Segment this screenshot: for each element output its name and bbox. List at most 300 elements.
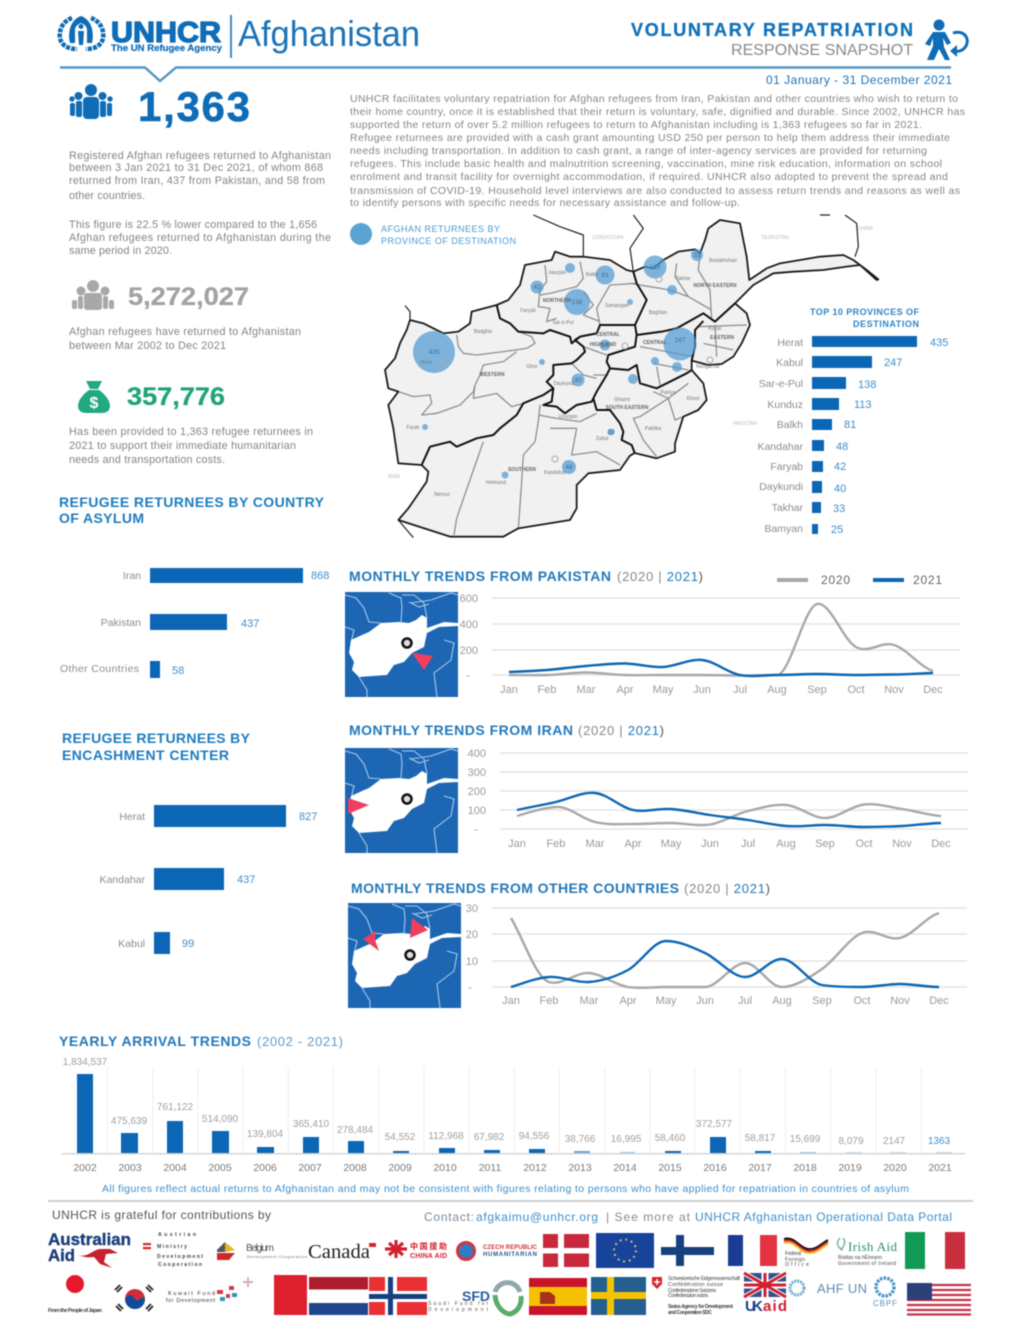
province names: Paktya — [660, 390, 676, 396]
year labels — [73, 1162, 952, 1174]
months: Oct — [853, 995, 871, 1007]
values — [182, 811, 317, 950]
months: May — [653, 684, 674, 696]
intro paragraph: transmission of COVID-19. Household level interviews are also conducted to assess return trends and reasons as well as — [350, 185, 960, 197]
bar values: 8,079 — [838, 1136, 864, 1147]
labels — [60, 570, 141, 675]
KPI: cumulative returns — [69, 280, 301, 352]
bubble values: 42 — [533, 284, 541, 291]
months: Jan — [500, 684, 518, 696]
months: Oct — [855, 838, 873, 850]
values: 247 — [884, 357, 902, 369]
logo: Czech Republic — [458, 1242, 538, 1260]
bar values: 365,410 — [293, 1119, 330, 1130]
logo: Canada: Canada — [308, 1241, 370, 1263]
bar chart: top 10 provinces: DESTINATION — [853, 319, 919, 329]
logo: Germany: Foreign — [785, 1257, 805, 1263]
province names — [406, 258, 737, 498]
heading: MONTHLY TRENDS FROM OTHER COUNTRIES — [351, 880, 679, 896]
icon: money bag — [78, 381, 110, 413]
logo: Switzerland: Confédération suisse — [668, 1282, 723, 1288]
flag: Spain — [529, 1278, 587, 1315]
bar values: 67,982 — [474, 1132, 505, 1143]
months: Jul — [733, 684, 747, 696]
months — [500, 684, 943, 696]
flag: Norway — [369, 1277, 427, 1315]
province names: Baghlan — [649, 310, 667, 316]
contact: Contact: — [424, 1210, 474, 1224]
province names: Nimroz — [434, 492, 450, 498]
panel: returnees by encashment center: ENCASHMENT CENTER — [62, 747, 229, 763]
panel: returnees by encashment center — [62, 730, 317, 954]
logo: Kuwait fund — [166, 1277, 253, 1304]
region names: HIGHLAND — [590, 342, 617, 348]
flag: United States — [907, 1283, 971, 1314]
logo: AHF — [790, 1281, 867, 1296]
thanks: UNHCR is grateful for contributions by — [52, 1208, 271, 1222]
logo: Germany: Federal — [785, 1251, 801, 1257]
labels: Iran — [123, 570, 141, 582]
values: 827 — [299, 811, 317, 823]
values: 58 — [172, 665, 184, 677]
panel: monthly trends from other countries: (2020 | 2021) — [684, 881, 770, 896]
heading: YEARLY ARRIVAL TRENDS — [59, 1033, 251, 1049]
province names: Sar-e-Pul — [552, 320, 574, 326]
province names: Uruzgan — [559, 414, 578, 420]
bubble values: 25 — [601, 342, 609, 349]
description: returned from Iran, 437 from Pakistan, and 58 from — [69, 175, 325, 187]
cash description: Has been provided to 1,363 refugee returnees in — [69, 426, 313, 438]
bar values: 514,090 — [202, 1114, 239, 1125]
locator map — [348, 903, 461, 1008]
logo: Switzerland: Swiss Agency for Development — [668, 1304, 733, 1310]
logo: Irish Aid: Irish Aid — [848, 1239, 898, 1254]
months: Jun — [696, 995, 714, 1007]
header: UNHCR logo and country name — [60, 13, 420, 58]
logo: Switzerland: and Cooperation SDC — [668, 1310, 712, 1316]
locator map — [345, 748, 458, 853]
map legend: PROVINCE OF DESTINATION — [381, 236, 516, 246]
logo: Austrian Development Cooperation: Austrian — [158, 1232, 196, 1238]
months: Feb — [538, 684, 556, 696]
neighbouring countries: CHINA — [857, 226, 873, 232]
cash amount: 357,776 — [127, 383, 225, 411]
logo: Belgium: Belgium — [246, 1243, 274, 1254]
bubble values: 138 — [572, 299, 583, 306]
logo: Austrian Development Cooperation: Development — [157, 1254, 203, 1260]
logo: AHF: AHF UN — [817, 1281, 867, 1296]
description: same period in 2020. — [69, 245, 172, 257]
legend — [777, 573, 942, 587]
province labels: Sar-e-Pul — [759, 378, 803, 390]
description: other countries. — [69, 190, 145, 202]
bubble values: 48 — [565, 464, 573, 471]
region names — [480, 283, 737, 473]
region names: EASTERN — [710, 335, 734, 341]
panel: yearly arrival trends: (2002 - 2021) — [257, 1034, 343, 1049]
province names: Kunar — [708, 326, 722, 332]
bar values: 38,766 — [565, 1134, 596, 1145]
province names: Faryab — [520, 308, 536, 314]
year labels: 2012 — [523, 1162, 547, 1174]
months: Apr — [619, 995, 637, 1007]
region names: CENTRAL — [596, 332, 620, 338]
panel: monthly trends from Pakistan: (2020 | 2021) — [617, 569, 703, 584]
logo: China: 中国援助 — [410, 1241, 447, 1251]
year labels: 2007 — [298, 1162, 322, 1174]
y axis: 200 — [460, 645, 478, 657]
months: Nov — [890, 995, 910, 1007]
year labels: 2018 — [793, 1162, 817, 1174]
logo: Irish Aid: Government of Ireland — [838, 1261, 896, 1267]
y axis: 100 — [468, 805, 486, 817]
values: 437 — [237, 874, 255, 886]
year labels: 2015 — [658, 1162, 682, 1174]
province names: Herat — [420, 360, 433, 366]
icon: person returning with arrow — [925, 20, 967, 60]
province labels — [757, 337, 804, 535]
year labels: 2017 — [748, 1162, 772, 1174]
logo: Belgium — [217, 1242, 307, 1260]
intro paragraph: UNHCR facilitates voluntary repatriation for Afghan refugees from Iran, Pakistan and other countries who wish to return to — [350, 93, 958, 105]
months: Oct — [847, 684, 865, 696]
logo: UK aid — [744, 1273, 787, 1315]
values: 48 — [836, 441, 848, 453]
logo: Austrian Development Cooperation: Ministry — [157, 1244, 187, 1250]
map small rings — [438, 276, 713, 462]
region names: CENTRAL — [643, 340, 667, 346]
bar values: 54,552 — [385, 1132, 416, 1143]
months: May — [656, 995, 677, 1007]
report subtitle: RESPONSE SNAPSHOT — [731, 42, 913, 59]
bar values: 372,577 — [696, 1119, 733, 1130]
logo: Australian Aid: Australian — [48, 1230, 131, 1249]
months: Nov — [892, 838, 912, 850]
description: Afghan refugees returned to Afghanistan during the — [69, 232, 331, 244]
map: Afghanistan returnees by province — [385, 215, 878, 538]
months: Dec — [923, 684, 943, 696]
logo tagline: The UN Refugee Agency — [111, 43, 223, 54]
panel: returnees by country of asylum — [59, 494, 329, 678]
labels: Other Countries — [60, 663, 139, 675]
province labels: Kandahar — [757, 441, 803, 453]
intro paragraph: to identify persons with specific needs for necessary assistance and follow-up. — [350, 197, 740, 209]
description: between 3 Jan 2021 to 31 Dec 2021, of whom 868 — [69, 162, 323, 174]
logo: Switzerland: Confederaziun svizra — [668, 1293, 708, 1299]
bubble values: 40 — [574, 377, 582, 384]
labels — [99, 811, 145, 950]
province names: Zabul — [596, 436, 608, 442]
province names: Badakhshan — [709, 258, 737, 264]
province names: Ghor — [526, 364, 538, 370]
logo: Kuwait fund: for Development — [166, 1298, 215, 1304]
logo: Czech Republic: CZECH REPUBLIC — [483, 1245, 538, 1251]
logo: UK aid: UK — [745, 1298, 763, 1315]
cumulative description — [69, 326, 301, 352]
more: | See more at — [606, 1210, 691, 1224]
province names: Jawzjan — [548, 270, 566, 276]
province labels: Kabul — [776, 357, 803, 369]
flag: Finland — [661, 1235, 714, 1266]
values: 435 — [930, 337, 948, 349]
logo: Germany — [784, 1239, 828, 1268]
logo: CBPF UN emblem — [873, 1278, 897, 1308]
logo: Germany: Office — [785, 1262, 809, 1268]
logo: Saudi Fund for Development: Development — [428, 1307, 489, 1313]
bars — [154, 805, 286, 954]
labels: Kabul — [118, 938, 145, 950]
year labels: 2021 — [928, 1162, 952, 1174]
province bubbles — [413, 249, 703, 478]
values: 81 — [844, 419, 856, 431]
months: Sep — [807, 684, 827, 696]
logo: UK aid: aid — [763, 1298, 787, 1315]
province names: Khost — [687, 396, 700, 402]
values: 33 — [833, 503, 845, 515]
footer rule — [48, 1200, 973, 1202]
neighbouring countries — [388, 226, 873, 480]
year labels: 2019 — [838, 1162, 862, 1174]
bubble values: 81 — [601, 272, 609, 279]
y axis: 10 — [466, 956, 478, 968]
flag: Italy — [905, 1232, 965, 1269]
months: Jan — [502, 995, 520, 1007]
bar values: 1,834,537 — [63, 1057, 108, 1068]
logo: Saudi Fund for Development — [428, 1283, 521, 1314]
donor logos row 1 — [48, 1230, 965, 1269]
cumulative description: Afghan refugees have returned to Afghanistan — [69, 326, 301, 338]
y axis: 20 — [466, 929, 478, 941]
panel: returnees by country of asylum: OF ASYLUM — [59, 510, 144, 526]
year labels: 2016 — [703, 1162, 727, 1174]
neighbouring countries: TAJIKISTAN — [761, 235, 789, 241]
year labels: 2004 — [163, 1162, 187, 1174]
y axis — [460, 593, 478, 682]
logo: Australian Aid: Aid — [48, 1246, 75, 1265]
country title: Afghanistan — [238, 13, 420, 54]
icon: UNHCR emblem — [60, 16, 103, 49]
y axis: - — [466, 670, 470, 682]
big number: 1,363 — [138, 83, 250, 130]
months: Aug — [767, 684, 787, 696]
y axis: 200 — [468, 786, 486, 798]
bubble values: 247 — [675, 337, 686, 344]
province names: Daykundi — [554, 381, 574, 387]
year labels: 2008 — [343, 1162, 367, 1174]
logo: Republic of Korea — [115, 1285, 153, 1311]
months: Mar — [586, 838, 605, 850]
region names: NORTH EASTERN — [693, 283, 737, 289]
months: Nov — [884, 684, 904, 696]
logo: Switzerland: Schweizerische Eidgenossenschaft — [668, 1276, 741, 1282]
province names: Balkh — [586, 272, 598, 278]
description — [69, 150, 331, 257]
months: Mar — [577, 684, 596, 696]
logo: CBPF UN emblem: CBPF — [873, 1299, 897, 1308]
y axis: 400 — [468, 748, 486, 760]
flag: Netherlands — [309, 1277, 368, 1315]
bar values: 58,817 — [745, 1133, 776, 1144]
months: Dec — [929, 995, 949, 1007]
flag: Sweden — [591, 1277, 646, 1315]
bar values: 15,699 — [790, 1134, 821, 1145]
gridlines — [492, 598, 960, 675]
bubble values: 113 — [650, 264, 661, 271]
bar values: 94,556 — [519, 1131, 550, 1142]
KPI: refugees returned 2021 — [69, 83, 331, 257]
bar values: 761,122 — [157, 1102, 194, 1113]
y axis: 600 — [460, 593, 478, 605]
values: 138 — [858, 379, 876, 391]
logo: Switzerland — [652, 1276, 741, 1316]
months: Mar — [580, 995, 599, 1007]
y axis: - — [474, 824, 478, 836]
neighbouring countries: UZBEKISTAN — [592, 235, 624, 241]
province labels: Herat — [777, 337, 803, 349]
logo: China: CHINA AID — [410, 1253, 447, 1260]
months: Aug — [772, 995, 792, 1007]
panel: monthly trends from Iran: (2020 | 2021) — [578, 723, 664, 738]
labels: Herat — [119, 811, 145, 823]
bar values: 2147 — [883, 1136, 906, 1147]
donor logos row 2 — [48, 1273, 971, 1316]
province names: Helmand — [486, 480, 506, 486]
legend bubble — [350, 223, 372, 245]
logo: Austrian Development Cooperation — [143, 1232, 203, 1268]
panel: yearly arrival trends — [59, 1033, 965, 1195]
locator map — [345, 592, 458, 697]
header rule with chevron — [60, 68, 951, 81]
year labels: 2005 — [208, 1162, 232, 1174]
panel: monthly trends from Pakistan — [345, 568, 960, 697]
y axis: 30 — [466, 903, 478, 915]
province labels: Bamyan — [764, 523, 803, 535]
description: This figure is 22.5 % lower compared to the 1,656 — [69, 219, 317, 231]
bar values — [63, 1057, 951, 1147]
year labels: 2003 — [118, 1162, 142, 1174]
province names: Badghis — [474, 329, 493, 335]
bubble values: 10 — [607, 429, 615, 436]
panel: monthly trends from Iran — [345, 722, 968, 853]
logo: Saudi Fund for Development: SFD — [462, 1288, 490, 1304]
heading: REFUGEE RETURNEES BY COUNTRY — [59, 494, 325, 510]
flag: Denmark — [543, 1234, 589, 1267]
report title: VOLUNTARY REPATRIATION — [631, 20, 913, 40]
logo: Australian Aid — [48, 1230, 131, 1268]
cumulative description: between Mar 2002 to Dec 2021 — [69, 340, 226, 352]
line 2021 — [509, 660, 933, 676]
months: Sep — [815, 838, 835, 850]
baseline — [62, 1153, 965, 1154]
values — [831, 337, 948, 536]
intro paragraph: needs including transportation. In addition to cash grant, a range of inter-agency services are provided for returning — [350, 145, 927, 157]
values: 99 — [182, 938, 194, 950]
cumulative number: 5,272,027 — [128, 283, 249, 311]
report title block — [631, 20, 952, 87]
year labels: 2002 — [73, 1162, 97, 1174]
year labels: 2014 — [613, 1162, 637, 1174]
neighbouring countries: PAKISTAN — [733, 421, 757, 427]
line 2020 — [511, 913, 939, 988]
months — [502, 995, 949, 1007]
y axis — [466, 903, 478, 994]
province labels: Daykundi — [759, 481, 803, 493]
province labels: Takhar — [771, 502, 804, 514]
province names: Kandahar — [544, 470, 566, 476]
logo: Saudi Fund for Development: Saudi Fund for — [428, 1301, 488, 1307]
province labels: Balkh — [777, 419, 803, 431]
bars — [812, 336, 917, 534]
months: Jul — [738, 995, 752, 1007]
cash description: 2021 to support their immediate humanitarian — [69, 440, 296, 452]
heading: REFUGEE RETURNEES BY — [62, 730, 251, 746]
y axis: 300 — [468, 767, 486, 779]
logo divider — [230, 15, 232, 58]
months: Dec — [931, 838, 951, 850]
province labels: Faryab — [770, 461, 803, 473]
months: May — [661, 838, 682, 850]
y axis: - — [468, 982, 472, 994]
months: Feb — [547, 838, 565, 850]
legend: 2021 — [913, 573, 942, 587]
months: Sep — [812, 995, 832, 1007]
neighbouring countries: IRAN — [388, 474, 400, 480]
line 2020 — [509, 604, 933, 676]
report dates: 01 January - 31 December 2021 — [766, 73, 952, 87]
values: 437 — [241, 618, 259, 630]
bar values: 16,995 — [611, 1134, 642, 1145]
flag: France — [728, 1235, 777, 1266]
logo: Kuwait fund: Kuwait Fund — [168, 1291, 215, 1297]
bars — [77, 1074, 952, 1153]
bar values: 112,968 — [428, 1131, 464, 1142]
bars — [150, 568, 303, 678]
intro paragraph: supported the return of over 5.2 million refugees to return to Afghanistan including is 1,363 refugees so far in 2021. — [350, 119, 922, 131]
y axis — [468, 748, 486, 836]
months: Aug — [776, 838, 796, 850]
map legend — [350, 223, 516, 246]
legend text: AFGHAN RETURNEES BY — [381, 224, 500, 234]
bar values: 278,484 — [337, 1125, 374, 1136]
labels: Kandahar — [99, 874, 145, 886]
logo wordmark: UNHCR — [111, 17, 221, 49]
logo: Japan: From the People of Japan — [48, 1308, 103, 1314]
icon: money bag: $ — [90, 395, 99, 412]
values: 868 — [311, 570, 329, 582]
map outlines — [385, 215, 878, 538]
months: Jan — [508, 838, 526, 850]
legend: 2020 — [821, 573, 850, 587]
footer contact line: UNHCR Afghanistan Operational Data Portal — [695, 1210, 952, 1224]
flag: EU — [596, 1233, 654, 1268]
intro paragraph — [350, 93, 965, 209]
values: 42 — [834, 461, 846, 473]
icon: people group — [69, 84, 113, 119]
bar values: 58,460 — [655, 1133, 686, 1144]
year labels: 2006 — [253, 1162, 277, 1174]
logo: Irish Aid: Rialtas na hÉireann — [838, 1254, 882, 1261]
logo: Japan — [48, 1275, 103, 1314]
months: Jul — [741, 838, 755, 850]
logo: Austrian Development Cooperation: Cooperation — [158, 1262, 202, 1268]
y axis: 400 — [460, 619, 478, 631]
heading: MONTHLY TRENDS FROM IRAN — [349, 722, 573, 738]
months — [508, 838, 951, 850]
labels: Pakistan — [101, 617, 141, 629]
panel: monthly trends from other countries — [348, 880, 967, 1008]
year labels: 2020 — [883, 1162, 907, 1174]
line 2021 — [517, 793, 941, 827]
